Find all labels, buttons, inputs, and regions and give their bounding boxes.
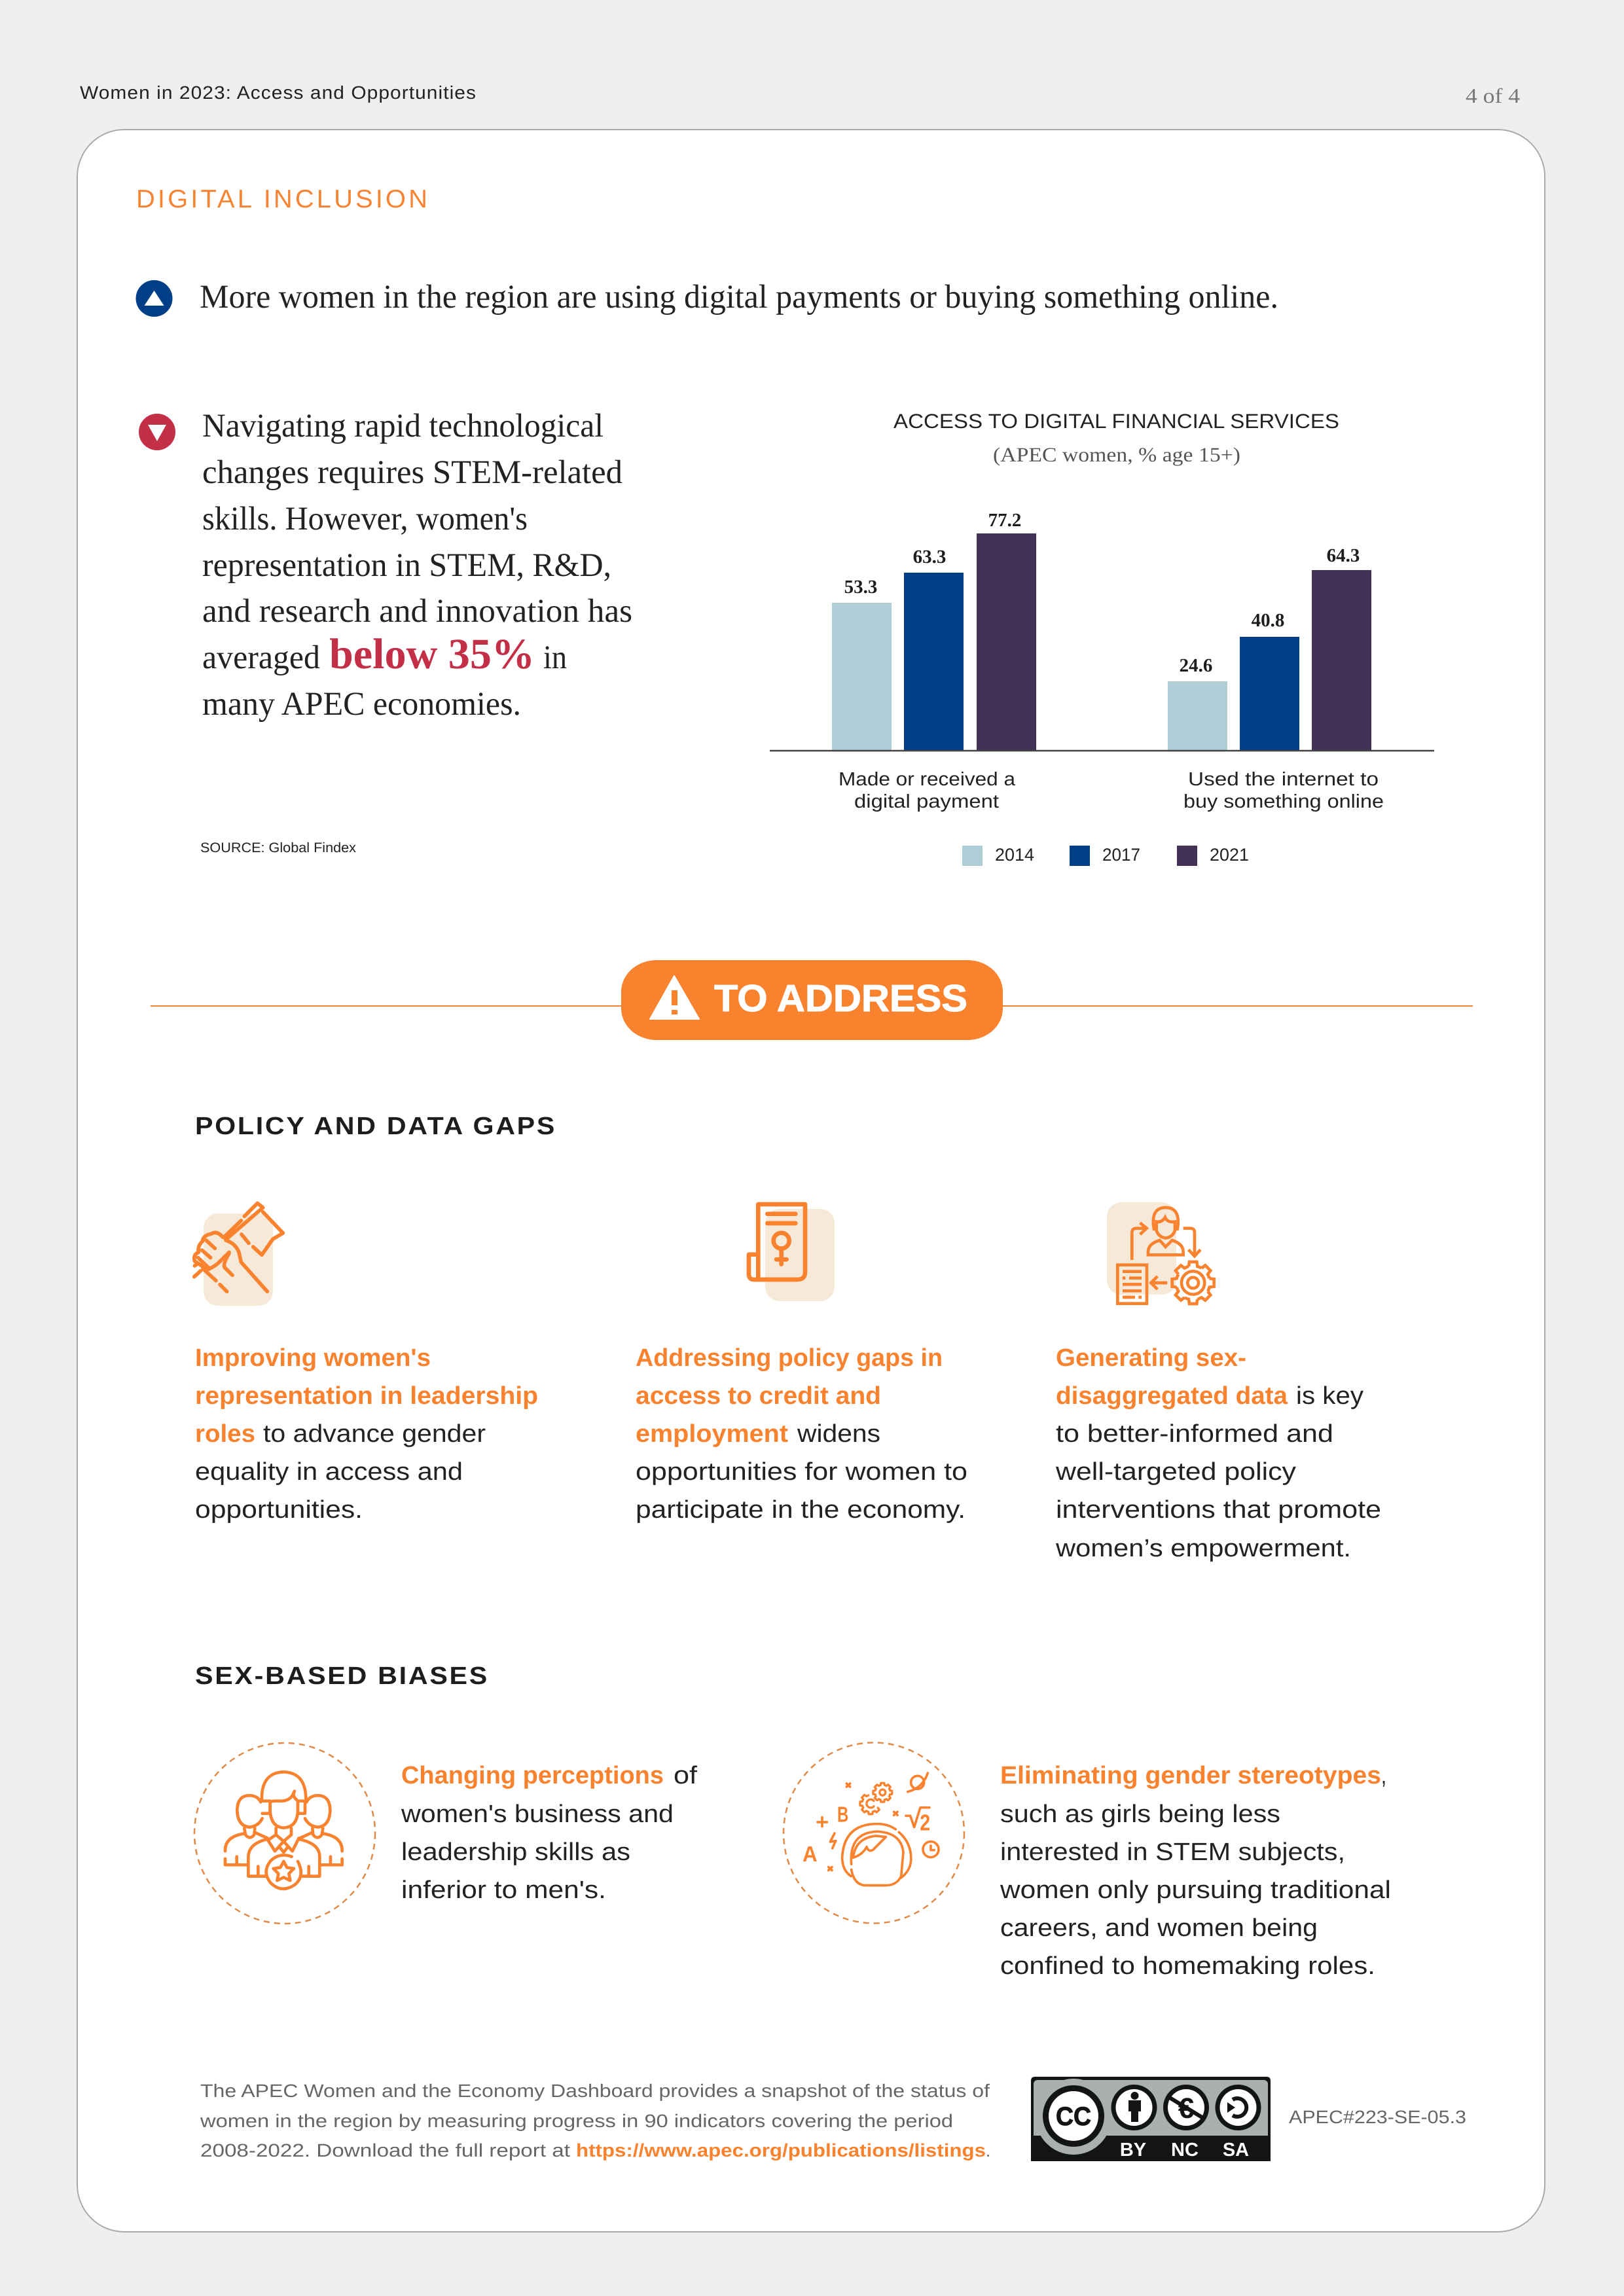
bar value labels: 77.2	[988, 510, 1021, 531]
statement: STEM representation: Navigating rapid technological	[202, 408, 604, 444]
category labels	[839, 769, 1384, 812]
icon: down arrow in red circle	[139, 414, 175, 450]
text: eliminating gender stereotypes: careers, and women being	[1000, 1914, 1318, 1942]
text: changing perceptions	[401, 1762, 697, 1904]
icon: person, gear and data cycle	[1107, 1202, 1214, 1304]
text: sex-disaggregated data: disaggregated data	[1056, 1382, 1288, 1410]
legend: 2017	[1102, 845, 1140, 865]
text: policy gaps in credit and employment: Addressing policy gaps in	[636, 1344, 943, 1372]
icon: group of women with star medal in dashed circle	[194, 1743, 375, 1924]
text: leadership representation: roles	[195, 1420, 255, 1448]
text: policy gaps in credit and employment: participate in the economy.	[636, 1496, 965, 1524]
statement: STEM representation: changes requires STEM-related	[202, 454, 623, 491]
text: sex-disaggregated data: is key	[1296, 1382, 1363, 1410]
text: leadership representation: opportunities.	[195, 1496, 363, 1524]
text: leadership representation: representation in leadership	[195, 1382, 538, 1410]
footer note: https://www.apec.org/publications/listings	[576, 2140, 986, 2161]
text: eliminating gender stereotypes: interested in STEM subjects,	[1000, 1839, 1345, 1866]
chart subtitle: (APEC women, % age 15+)	[993, 443, 1240, 466]
Creative Commons BY-NC-SA badge	[1031, 2077, 1271, 2161]
icon: head with STEM symbols in dashed circle: B	[837, 1802, 848, 1827]
Creative Commons BY-NC-SA badge: €	[1178, 2092, 1194, 2125]
statement: STEM representation: many APEC economies.	[202, 686, 521, 723]
running header: report title: Women in 2023: Access and Opportunities	[80, 82, 477, 103]
icon: hand holding flag	[194, 1203, 283, 1306]
banner: to address	[621, 960, 1003, 1040]
statement: STEM representation: below 35%	[329, 630, 535, 678]
heading: sex-based biases: SEX-BASED BIASES	[195, 1662, 489, 1690]
text: policy gaps in credit and employment: opportunities for women to	[636, 1458, 967, 1486]
text: policy gaps in credit and employment	[636, 1344, 967, 1524]
footer note	[200, 2081, 990, 2161]
bar chart: access to digital financial services	[770, 410, 1434, 866]
text: leadership representation: equality in access and	[195, 1458, 463, 1486]
text: sex-disaggregated data: well-targeted policy	[1055, 1458, 1296, 1486]
banner: to address: TO ADDRESS	[714, 977, 967, 1020]
chart title: ACCESS TO DIGITAL FINANCIAL SERVICES	[893, 410, 1339, 433]
legend: 2014	[995, 845, 1034, 865]
bar value labels	[844, 510, 1360, 676]
category labels: Used the internet to	[1188, 769, 1379, 790]
bars: used the internet to buy something online	[1168, 570, 1371, 751]
text: policy gaps in credit and employment: access to credit and	[636, 1382, 881, 1410]
text: eliminating gender stereotypes: ,	[1381, 1762, 1386, 1789]
statement: STEM representation: in	[543, 639, 567, 676]
page number: 4 of 4	[1466, 84, 1520, 107]
bar value labels: 40.8	[1252, 610, 1284, 631]
statement: STEM representation: averaged	[202, 639, 320, 676]
bar value labels: 24.6	[1180, 655, 1212, 676]
heading: digital inclusion: DIGITAL INCLUSION	[136, 185, 430, 213]
text: sex-disaggregated data: Generating sex-	[1056, 1344, 1246, 1372]
publication number: APEC#223-SE-05.3	[1289, 2107, 1466, 2127]
footer note: The APEC Women and the Economy Dashboard provides a snapshot of the status of	[200, 2081, 990, 2101]
bar value labels: 64.3	[1327, 545, 1360, 566]
text: changing perceptions: women's business and	[401, 1801, 674, 1828]
text: leadership representation: to advance gender	[263, 1420, 486, 1448]
icon: warning triangle	[650, 976, 699, 1019]
text: changing perceptions: inferior to men's.	[401, 1876, 606, 1904]
statement: STEM representation: and research and innovation has	[202, 593, 632, 630]
legend	[962, 845, 1249, 866]
Creative Commons BY-NC-SA badge: SA	[1223, 2140, 1249, 2161]
text: leadership representation: Improving women's	[195, 1344, 431, 1372]
source note: SOURCE: Global Findex	[200, 840, 357, 855]
text: eliminating gender stereotypes	[1000, 1762, 1391, 1980]
statement: STEM representation	[202, 408, 632, 723]
icon: head with STEM symbols in dashed circle: 2	[920, 1810, 930, 1835]
text: eliminating gender stereotypes: women only pursuing traditional	[1000, 1876, 1391, 1904]
category labels: buy something online	[1183, 791, 1384, 812]
heading: policy and data gaps: POLICY AND DATA GAPS	[195, 1113, 556, 1140]
text: changing perceptions: of	[674, 1762, 697, 1789]
icon: head with STEM symbols in dashed circle: A	[803, 1842, 818, 1866]
footer note: women in the region by measuring progress in 90 indicators covering the period	[200, 2111, 953, 2131]
Creative Commons BY-NC-SA badge: NC	[1171, 2140, 1199, 2161]
bars: made or received a digital payment	[832, 533, 1036, 751]
footer note: .	[986, 2140, 990, 2161]
icon: policy document with female symbol	[749, 1204, 835, 1301]
text: sex-disaggregated data: women’s empowerment.	[1055, 1535, 1351, 1562]
text: eliminating gender stereotypes: confined to homemaking roles.	[1000, 1952, 1375, 1980]
statement: STEM representation: skills. However, women's	[202, 501, 528, 537]
bar value labels: 53.3	[844, 577, 877, 598]
Creative Commons BY-NC-SA badge: CC	[1056, 2102, 1091, 2131]
text: policy gaps in credit and employment: employment	[636, 1420, 788, 1448]
icon: head with STEM symbols in dashed circle	[784, 1742, 964, 1923]
text: eliminating gender stereotypes: Eliminating gender stereotypes	[1000, 1762, 1381, 1789]
category labels: Made or received a	[839, 769, 1016, 790]
text: changing perceptions: Changing perceptions	[401, 1762, 664, 1789]
text: policy gaps in credit and employment: widens	[797, 1420, 880, 1448]
statement: STEM representation: representation in STEM, R&D,	[202, 547, 611, 584]
text: sex-disaggregated data	[1055, 1344, 1381, 1562]
Creative Commons BY-NC-SA badge: BY	[1120, 2140, 1146, 2161]
legend: 2021	[1210, 845, 1249, 865]
text: sex-disaggregated data: to better-informed and	[1056, 1420, 1333, 1448]
text: eliminating gender stereotypes: such as girls being less	[1000, 1801, 1280, 1828]
text: changing perceptions: leadership skills as	[401, 1839, 630, 1866]
statement: digital payments: More women in the region are using digital payments or buying something online.	[200, 279, 1278, 315]
category labels: digital payment	[854, 791, 999, 812]
icon: up arrow in blue circle	[136, 280, 173, 317]
footer note: 2008-2022. Download the full report at	[200, 2140, 570, 2161]
bar value labels: 63.3	[913, 547, 946, 567]
text: sex-disaggregated data: interventions that promote	[1056, 1496, 1381, 1524]
text: leadership representation	[195, 1344, 538, 1524]
